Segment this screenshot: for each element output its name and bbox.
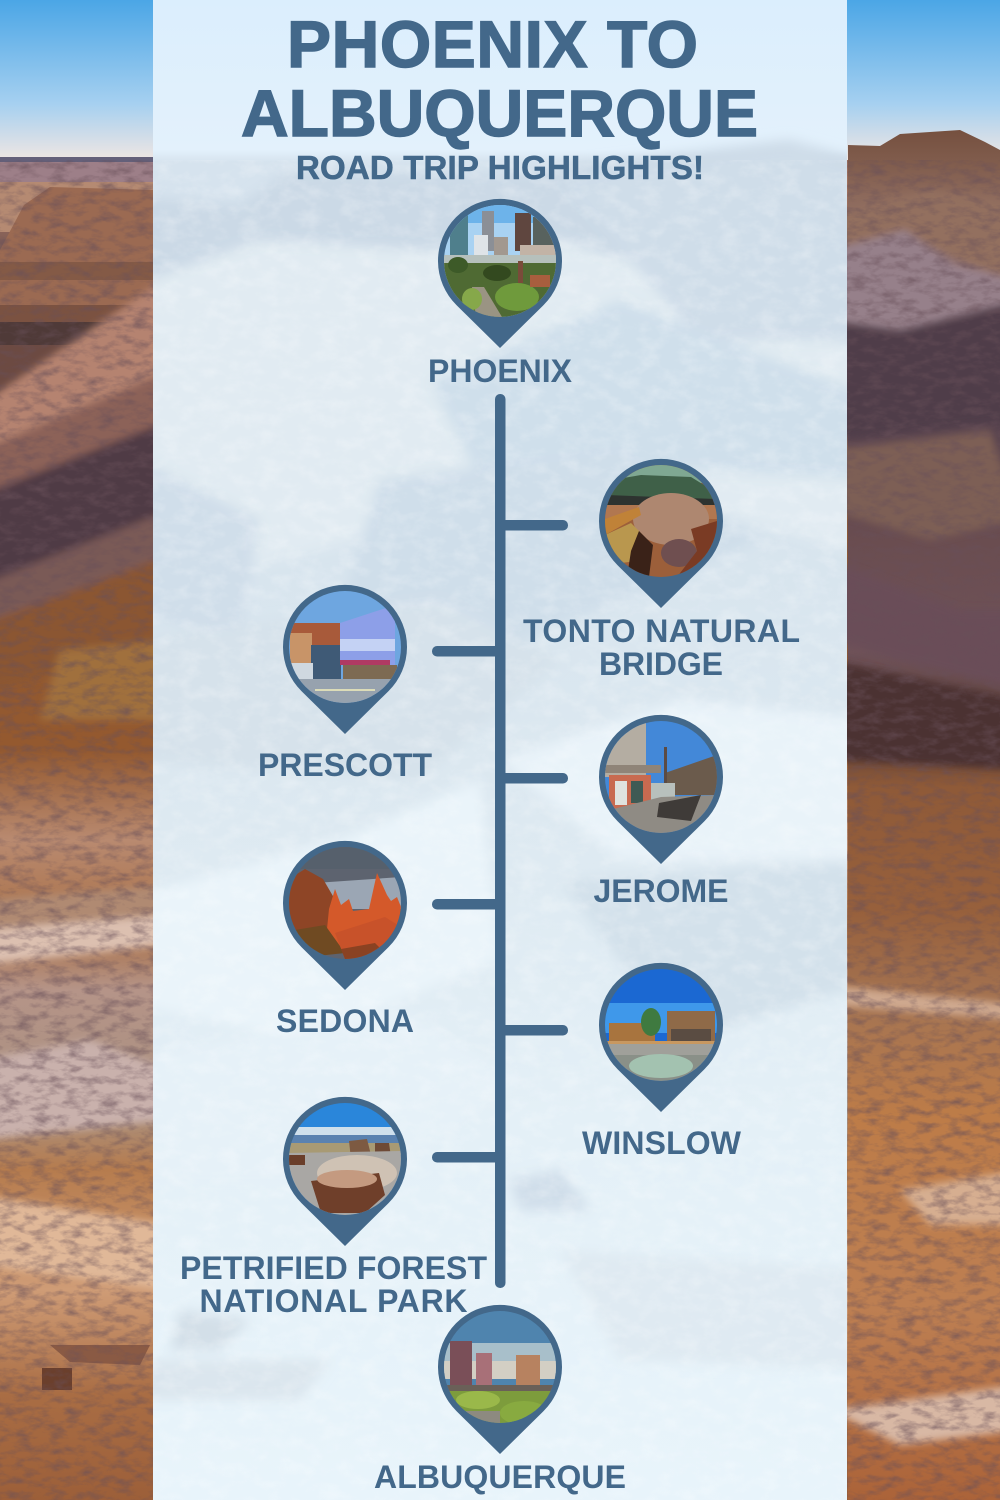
label: Tonto Natural Bridge: BRIDGE [599,646,723,682]
label: Jerome: JEROME [594,873,728,909]
translucent central panel [120,0,880,1500]
left horizon and distant plain [0,157,153,232]
label: Prescott: PRESCOTT [258,747,432,783]
left mesa [0,187,153,410]
pin: Sedona [283,841,407,990]
pin: Petrified Forest National Park [283,1097,407,1246]
subtitle: ROAD TRIP HIGHLIGHTS! [296,149,704,186]
label: Phoenix: PHOENIX [428,353,573,389]
title: ALBUQUERQUE [241,76,758,150]
right badlands [830,130,1000,1500]
pin: Jerome [599,715,723,864]
left rocks [42,1345,150,1390]
label: Albuquerque: ALBUQUERQUE [374,1459,626,1495]
label: Petrified Forest National Park: PETRIFIED FOREST [180,1250,487,1286]
pin: Tonto Natural Bridge [599,459,723,608]
pin: Phoenix [438,199,562,348]
label: Winslow: WINSLOW [582,1125,742,1161]
label: Tonto Natural Bridge: TONTO NATURAL [523,613,800,649]
timeline spine and branches [432,394,568,1288]
label: Petrified Forest National Park [180,1250,487,1319]
label: Petrified Forest National Park: NATIONAL PARK [200,1283,468,1319]
title [241,7,758,150]
label: Tonto Natural Bridge [523,613,800,682]
pin: Winslow [599,963,723,1112]
left slope bands [0,286,153,1290]
pin: Albuquerque [438,1305,562,1454]
pin: Prescott [283,585,407,734]
title: PHOENIX TO [287,7,698,81]
label: Sedona: SEDONA [276,1003,414,1039]
